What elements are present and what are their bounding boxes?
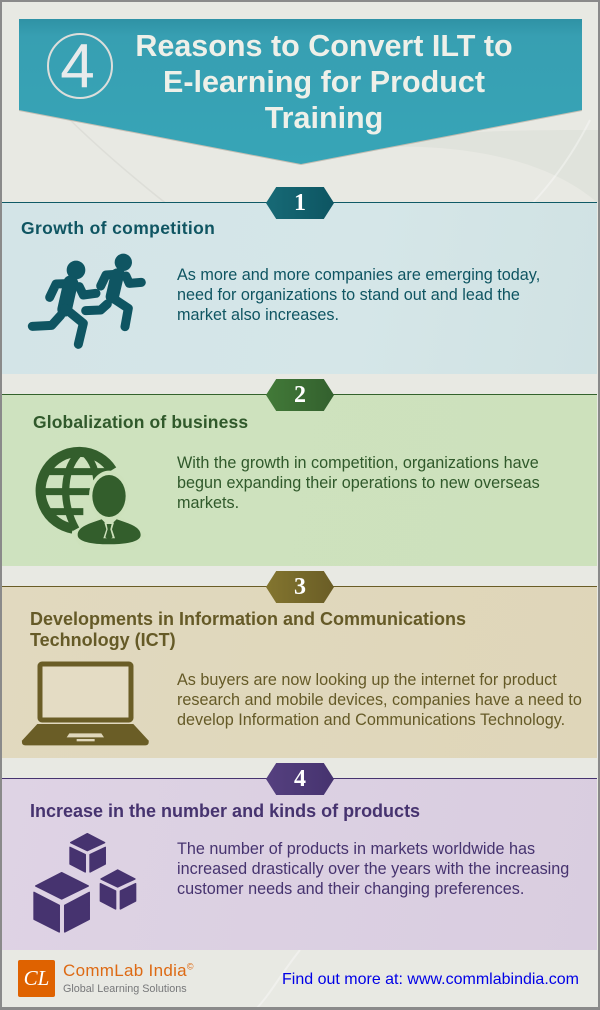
text: growth of competition: market also increases. bbox=[177, 306, 339, 324]
text: developments in ICT: research and mobile devices, companies have a need to bbox=[177, 691, 582, 709]
banner bbox=[19, 19, 582, 165]
text: increase in products: increased drastically over the years with the increasing bbox=[177, 860, 569, 878]
logo mark bbox=[18, 960, 55, 997]
text: increase in products bbox=[177, 840, 569, 898]
panel: developments in ICT bbox=[2, 586, 597, 758]
divider badge 3: 3 bbox=[294, 574, 306, 600]
text: developments in ICT: As buyers are now looking up the internet for product bbox=[177, 671, 557, 689]
text: globalization of business bbox=[177, 454, 540, 512]
banner shape bbox=[19, 19, 582, 165]
icon: laptop bbox=[22, 662, 149, 746]
divider badge 1: 1 bbox=[294, 190, 306, 216]
divider badge 4: 4 bbox=[294, 766, 306, 792]
icon: runners bbox=[28, 254, 146, 349]
text: globalization of business: With the growth in competition, organizations have bbox=[177, 454, 539, 472]
text: growth of competition: need for organizations to stand out and lead the bbox=[177, 286, 520, 304]
divider badge 4 bbox=[266, 763, 334, 795]
logo name: CommLab India© bbox=[63, 961, 194, 980]
heading: globalization of business: Globalization of business bbox=[33, 412, 248, 432]
footer link: Find out more at: www.commlabindia.com bbox=[282, 971, 579, 988]
text: globalization of business: markets. bbox=[177, 494, 239, 512]
title number 4 in circle bbox=[47, 33, 113, 99]
icon: globe and businessman bbox=[36, 446, 141, 544]
text: growth of competition bbox=[177, 266, 540, 324]
logo tagline: Global Learning Solutions bbox=[63, 983, 187, 995]
title bbox=[135, 29, 513, 135]
heading: developments in ICT bbox=[30, 609, 466, 650]
title: Training bbox=[265, 101, 383, 135]
text: growth of competition: As more and more companies are emerging today, bbox=[177, 266, 540, 284]
text: globalization of business: begun expanding their operations to new overseas bbox=[177, 474, 540, 492]
footer logo bbox=[18, 960, 194, 997]
panel: globalization of business bbox=[2, 394, 597, 566]
text: developments in ICT: develop Information and Communications Technology. bbox=[177, 711, 565, 729]
divider badge 2 bbox=[266, 379, 334, 411]
title number 4 in circle: 4 bbox=[60, 32, 95, 101]
panel: growth of competition bbox=[2, 202, 597, 374]
panel: increase in products bbox=[2, 778, 597, 950]
icon: boxes bbox=[33, 833, 136, 933]
divider badge 1 bbox=[266, 187, 334, 219]
divider badge 2: 2 bbox=[294, 382, 306, 408]
heading: growth of competition: Growth of competition bbox=[21, 218, 215, 238]
title: E-learning for Product bbox=[163, 65, 485, 99]
heading: developments in ICT: Technology (ICT) bbox=[30, 630, 176, 650]
text: developments in ICT bbox=[177, 671, 582, 729]
logo mark: CL bbox=[24, 966, 49, 990]
heading: developments in ICT: Developments in Information and Communications bbox=[30, 609, 466, 629]
title: Reasons to Convert ILT to bbox=[135, 29, 513, 63]
divider badge 3 bbox=[266, 571, 334, 603]
text: increase in products: The number of products in markets worldwide has bbox=[177, 840, 535, 858]
heading: increase in products: Increase in the number and kinds of products bbox=[30, 801, 420, 821]
text: increase in products: customer needs and their changing preferences. bbox=[177, 880, 524, 898]
